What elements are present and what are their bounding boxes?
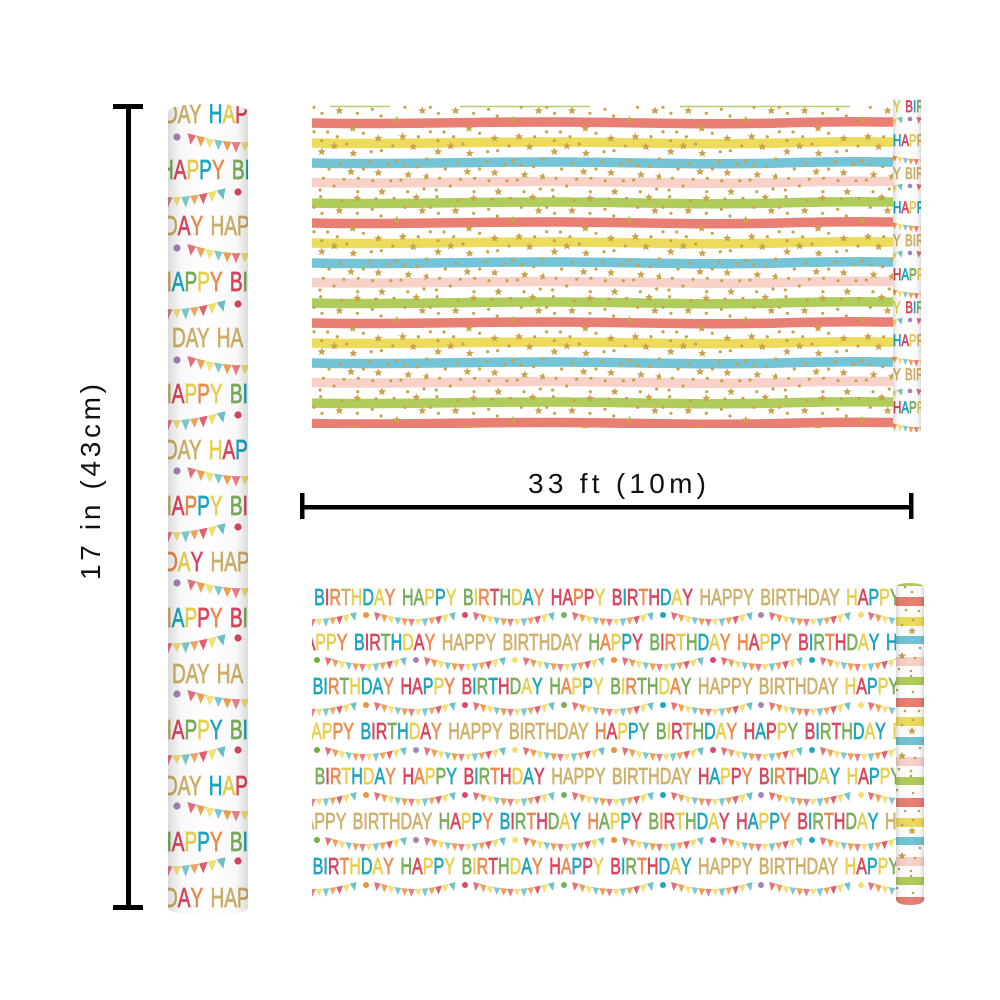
left roll lettering: DAY HAP — [164, 98, 248, 130]
left roll lettering: HAPPY BI — [158, 714, 248, 746]
small roll lettering: Y BIR — [893, 98, 925, 117]
small roll lettering — [893, 100, 921, 414]
repeating HAPPY BIRTHDAY lettering: HAPPY BIRTHDAY HAPPY BIRTHDAY HAPPY BIRTHDAY HAPPY BIRTHDAY H — [292, 809, 897, 835]
repeating HAPPY BIRTHDAY lettering: HAPPY BIRTHDAY HAPPY BIRTHDAY HAPPY BIRTHDAY HAPPY BIRTHDAY HAPPY — [254, 764, 901, 790]
left roll lettering: DAY HA — [172, 658, 243, 690]
small roll lettering: Y BIR — [893, 366, 924, 385]
repeating HAPPY BIRTHDAY lettering — [312, 588, 896, 874]
left roll lettering — [168, 104, 248, 908]
small roll lettering: Y BIR — [893, 165, 924, 184]
repeating HAPPY BIRTHDAY lettering: HAPPY BIRTHDAY HAPPY BIRTHDAY HAPPY BIRTHDAY HAPPY BIRTHDAY HAPPY — [252, 674, 899, 700]
dots between bunting — [314, 612, 864, 888]
repeating HAPPY BIRTHDAY lettering: HAPPY BIRTHDAY HAPPY BIRTHDAY HAPPY BIRTHDAY HAPPY BIRTHDAY HAPPY — [254, 585, 901, 611]
left roll bunting and dots — [168, 133, 248, 876]
left roll lettering: HAPPY BI — [158, 378, 248, 410]
left roll lettering: DAY HAP — [164, 882, 250, 914]
small roll at end of striped sheet — [893, 98, 921, 432]
roll gold stars — [896, 586, 921, 894]
colored stripes — [312, 122, 893, 424]
left roll lettering: DAY HAP — [164, 546, 250, 578]
bunting rows — [312, 612, 896, 897]
left roll lettering: HAPPY BI — [158, 826, 248, 858]
small roll lettering: HAPP — [893, 399, 924, 418]
left roll lettering: HAPPY BI — [158, 490, 248, 522]
left roll lettering: HAPPY BI — [160, 154, 250, 186]
repeating HAPPY BIRTHDAY lettering: HAPPY BIRTHDAY HAPPY BIRTHDAY HAPPY BIRTHDAY HAPPY BIRTHDAY HAPPY — [252, 854, 899, 880]
small roll lettering: Y BIR — [893, 232, 924, 251]
left roll lettering: DAY HAP — [164, 770, 248, 802]
height label: 17 in (43cm) — [75, 384, 106, 580]
width dimension arrow — [300, 493, 914, 519]
repeating HAPPY BIRTHDAY lettering: HAPPY BIRTHDAY HAPPY BIRTHDAY HAPPY BIRTHDAY HAPPY BIRTHDAY B — [300, 719, 903, 745]
small roll bunting — [893, 116, 921, 432]
left roll: birthday pattern standing upright — [168, 104, 248, 913]
repeating HAPPY BIRTHDAY lettering: HAPPY BIRTHDAY HAPPY BIRTHDAY HAPPY BIRTHDAY HAPPY BIRTHDAY H — [293, 630, 898, 656]
panel: striped paper unrolled — [312, 105, 893, 428]
gold stars and dots — [312, 105, 893, 428]
small roll lettering: HAPP — [893, 332, 924, 351]
top thin green stripe — [330, 106, 850, 108]
small roll lettering: HAPP — [893, 266, 924, 285]
small roll lettering: Y BIR — [893, 299, 925, 318]
height dimension arrow — [113, 104, 143, 910]
left roll lettering: HAPPY BI — [158, 266, 248, 298]
left roll lettering: DAY HAP — [164, 434, 248, 466]
width label: 33 ft (10m) — [528, 468, 706, 499]
left roll lettering: HAPPY BI — [158, 602, 248, 634]
small roll lettering: HAPP — [893, 199, 924, 218]
striped roll at end of birthday sheet — [896, 583, 924, 905]
left roll lettering: DAY HAP — [164, 210, 250, 242]
left roll lettering: DAY HA — [172, 322, 243, 354]
panel: happy birthday sheet unrolled — [312, 588, 896, 897]
small roll lettering: HAPP — [893, 132, 924, 151]
roll stripes — [896, 583, 924, 905]
